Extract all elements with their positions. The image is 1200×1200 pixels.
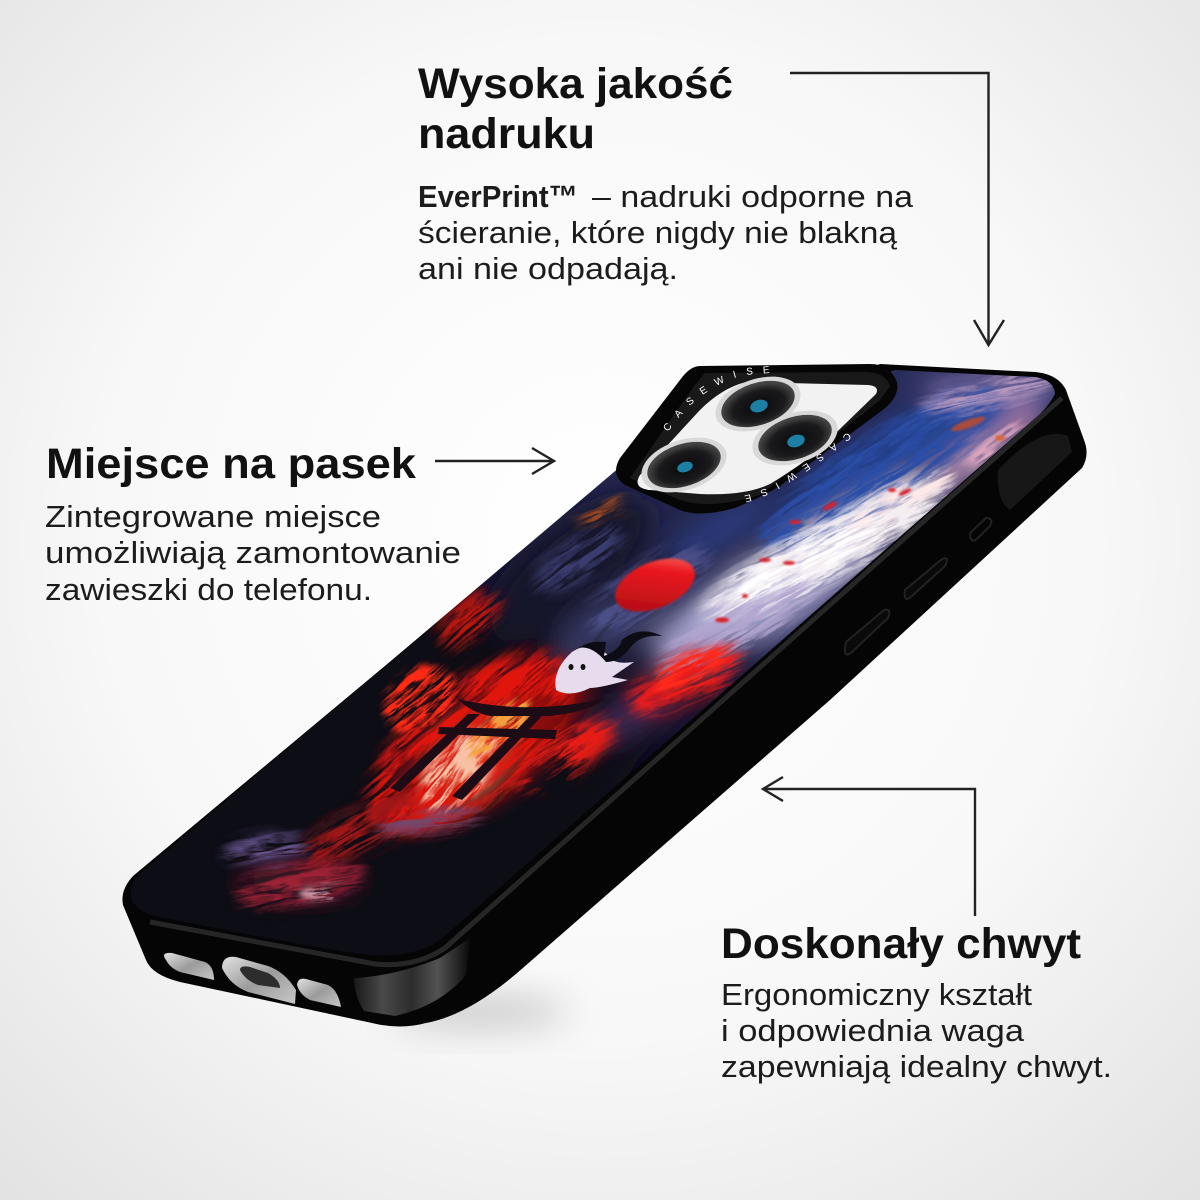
side button: volume down xyxy=(845,610,889,654)
camera module xyxy=(616,364,898,514)
phone case xyxy=(122,364,1087,1026)
heading: Wysoka jakość xyxy=(418,60,733,108)
body line 3: zapewniają idealny chwyt. xyxy=(721,1049,1112,1084)
arrow: grip xyxy=(763,777,975,916)
side button: action xyxy=(970,518,991,541)
back artwork xyxy=(130,370,1055,956)
arrow: print quality xyxy=(790,73,1004,345)
body: – nadruki odporne na xyxy=(592,179,914,214)
case brand text: CASEWISE xyxy=(664,366,770,430)
callout: grip xyxy=(721,920,1112,1084)
heading: Miejsce na pasek xyxy=(46,440,416,488)
camera opening xyxy=(638,382,877,494)
lens xyxy=(708,367,808,441)
phone shadow xyxy=(390,996,570,1028)
side rim highlight xyxy=(150,398,1062,965)
highlight strokes xyxy=(297,462,959,903)
body line 2: umożliwiają zamontowanie xyxy=(45,535,461,570)
body line 3: zawieszki do telefonu. xyxy=(45,572,372,607)
left speaker xyxy=(164,953,214,980)
body line 1: Ergonomiczny kształt xyxy=(721,977,1032,1012)
side button: volume up xyxy=(905,558,947,599)
lens xyxy=(745,401,845,475)
body line 2: ścieranie, które nigdy nie blakną xyxy=(418,215,898,250)
heading: Doskonały chwyt xyxy=(721,920,1081,968)
callout: strap slot xyxy=(45,440,461,607)
glossy bottom corner xyxy=(354,938,470,1016)
charging port xyxy=(222,957,296,1004)
case body xyxy=(122,364,1087,1026)
heading second line: nadruku xyxy=(418,110,595,158)
arrow: strap slot xyxy=(435,448,554,474)
callout: print quality xyxy=(418,60,914,286)
torii gate xyxy=(390,698,606,800)
soft underpainting xyxy=(227,372,1055,914)
lens xyxy=(634,428,734,502)
right speaker xyxy=(297,979,341,1007)
strap slot xyxy=(998,434,1072,510)
case brand text lower: CASEWISE xyxy=(744,434,850,502)
camera bump xyxy=(616,364,897,514)
body bold: EverPrint™ xyxy=(418,179,578,214)
body line 2: i odpowiednia waga xyxy=(721,1013,1025,1048)
body line 1: Zintegrowane miejsce xyxy=(45,499,381,534)
body line 3: ani nie odpadają. xyxy=(418,251,678,286)
red paint specks xyxy=(715,414,1005,622)
balloon xyxy=(592,556,696,642)
brushed strokes xyxy=(222,364,1061,916)
ghost with hat xyxy=(555,631,662,694)
